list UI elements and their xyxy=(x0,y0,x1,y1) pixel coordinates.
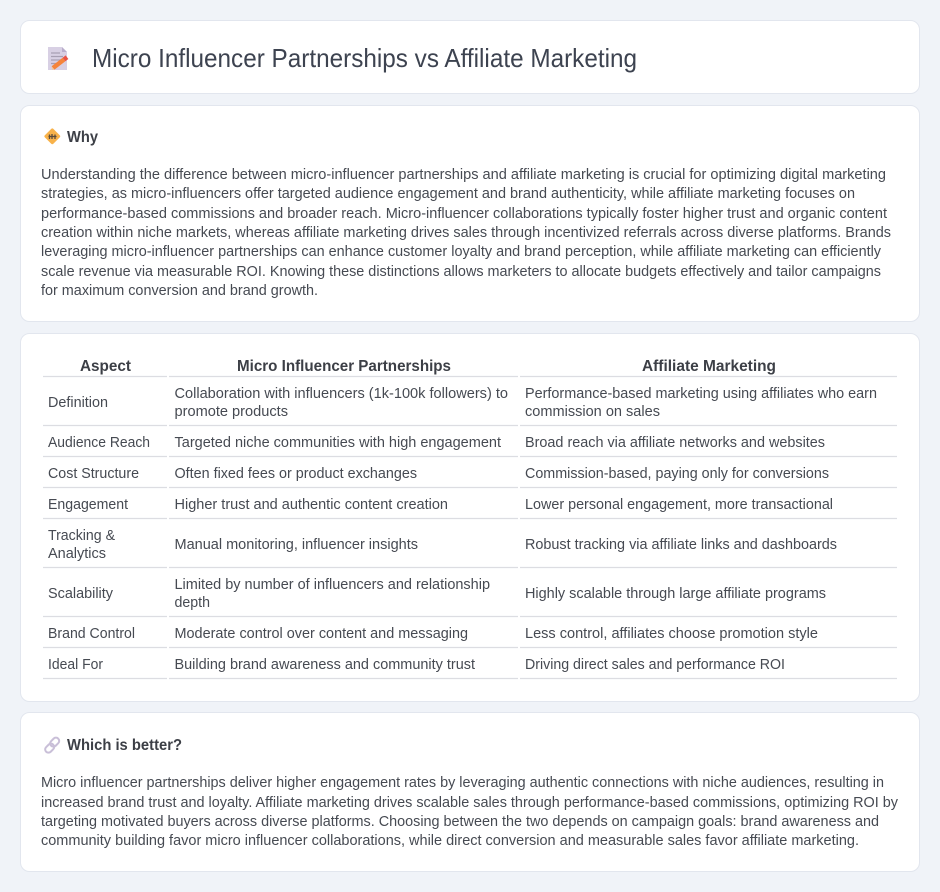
icon: orange diamond sign xyxy=(44,128,61,145)
heading: why: Why xyxy=(67,129,98,146)
table row: tracking and analytics xyxy=(48,528,837,562)
table header row: Affiliate Marketing xyxy=(642,358,776,375)
table row: definition: Definition xyxy=(48,395,108,411)
table header row: Micro Influencer Partnerships xyxy=(237,358,451,375)
table header row xyxy=(80,358,776,375)
table row: audience reach: Audience Reach xyxy=(48,435,150,451)
table row: definition: Collaboration with influencers (1k-100k followers) to xyxy=(174,386,508,402)
table row: definition: commission on sales xyxy=(525,404,660,420)
text block: why paragraph: Understanding the difference between micro-influencer partnerships and affiliate marketing is crucial for optimizing digital marketing xyxy=(41,167,886,183)
text block: which is better paragraph: increased brand trust and loyalty. Affiliate marketing drives scalable sales through performance-based commissions, optimizing ROI by xyxy=(41,795,899,811)
table row: engagement: Engagement xyxy=(48,497,128,513)
text block: why paragraph: leveraging micro-influencer partnerships can enhance customer loyalty and brand perception, while affiliate marketing can efficiently xyxy=(41,244,882,260)
table row: engagement: Lower personal engagement, more transactional xyxy=(525,497,833,513)
text block: which is better paragraph xyxy=(41,775,899,849)
table header row: Aspect xyxy=(80,358,132,375)
title: Micro Influencer Partnerships vs Affiliate Marketing xyxy=(92,45,637,73)
table row: brand control: Less control, affiliates choose promotion style xyxy=(525,626,818,642)
table row: scalability: depth xyxy=(174,595,210,611)
icon: chain link xyxy=(44,736,61,754)
text block: why paragraph: strategies, as micro-influencers offer targeted audience engagement and brand authenticity, while affiliate marketing focuses on xyxy=(41,186,855,202)
panel: title header xyxy=(20,20,920,94)
text block: why paragraph: performance-based commissions and broader reach. Micro-influencer collaborations typically foster higher trust and organic content xyxy=(41,206,887,222)
table row: audience reach: Targeted niche communities with high engagement xyxy=(174,435,501,451)
table row: audience reach: Broad reach via affiliate networks and websites xyxy=(525,435,825,451)
table row: tracking and analytics: Robust tracking via affiliate links and dashboards xyxy=(525,537,837,553)
text block: why paragraph: for maximum conversion and brand growth. xyxy=(41,283,318,299)
table row: tracking and analytics: Manual monitoring, influencer insights xyxy=(174,537,418,553)
table row: cost structure: Commission-based, paying only for conversions xyxy=(525,466,829,482)
panel: which is better xyxy=(20,712,920,872)
table row: scalability: Limited by number of influencers and relationship xyxy=(174,577,490,593)
text block: why paragraph xyxy=(41,167,891,299)
panel: comparison table xyxy=(20,334,920,702)
table row: scalability: Highly scalable through large affiliate programs xyxy=(525,586,826,602)
table row: engagement: Higher trust and authentic content creation xyxy=(174,497,448,513)
text block: why paragraph: scale revenue via measurable ROI. Knowing these distinctions allows marketers to allocate budgets effectively and tailor campaigns xyxy=(41,264,881,280)
icon: document with pencil xyxy=(48,47,67,70)
table row: brand control: Moderate control over content and messaging xyxy=(174,626,468,642)
panel: why xyxy=(20,106,920,322)
table row: tracking and analytics: Tracking & xyxy=(48,528,115,544)
text block: which is better paragraph: community building favor micro influencer collaborations, while direct conversion and measurable sales favor affiliate marketing. xyxy=(41,833,859,849)
table row: scalability: Scalability xyxy=(48,586,114,602)
table row: definition: Performance-based marketing using affiliates who earn xyxy=(525,386,877,402)
table row: cost structure xyxy=(48,466,829,482)
table row: ideal for: Driving direct sales and performance ROI xyxy=(525,657,785,673)
table row: scalability xyxy=(48,577,826,611)
text block: which is better paragraph: Micro influencer partnerships deliver higher engagement rates by leveraging authentic connections with niche audiences, resulting in xyxy=(41,775,884,791)
table row: tracking and analytics: Analytics xyxy=(48,546,106,562)
table row: brand control: Brand Control xyxy=(48,626,135,642)
table row: audience reach xyxy=(48,435,825,451)
table row: brand control xyxy=(48,626,818,642)
table row: ideal for: Building brand awareness and community trust xyxy=(174,657,475,673)
table row: ideal for: Ideal For xyxy=(48,657,103,673)
table row: engagement xyxy=(48,497,833,513)
table row: definition: promote products xyxy=(174,404,288,420)
table row: definition xyxy=(48,386,877,420)
table row: ideal for xyxy=(48,657,785,673)
heading: which is better: Which is better? xyxy=(67,737,182,754)
text block: which is better paragraph: targeting motivated buyers across diverse platforms. Choosing between the two depends on campaign goals: brand awareness and xyxy=(41,814,879,830)
text block: why paragraph: creation within niche markets, whereas affiliate marketing drives sales through incentivized referrals across diverse platforms. Brands xyxy=(41,225,891,241)
table row: cost structure: Cost Structure xyxy=(48,466,139,482)
table row: cost structure: Often fixed fees or product exchanges xyxy=(174,466,417,482)
